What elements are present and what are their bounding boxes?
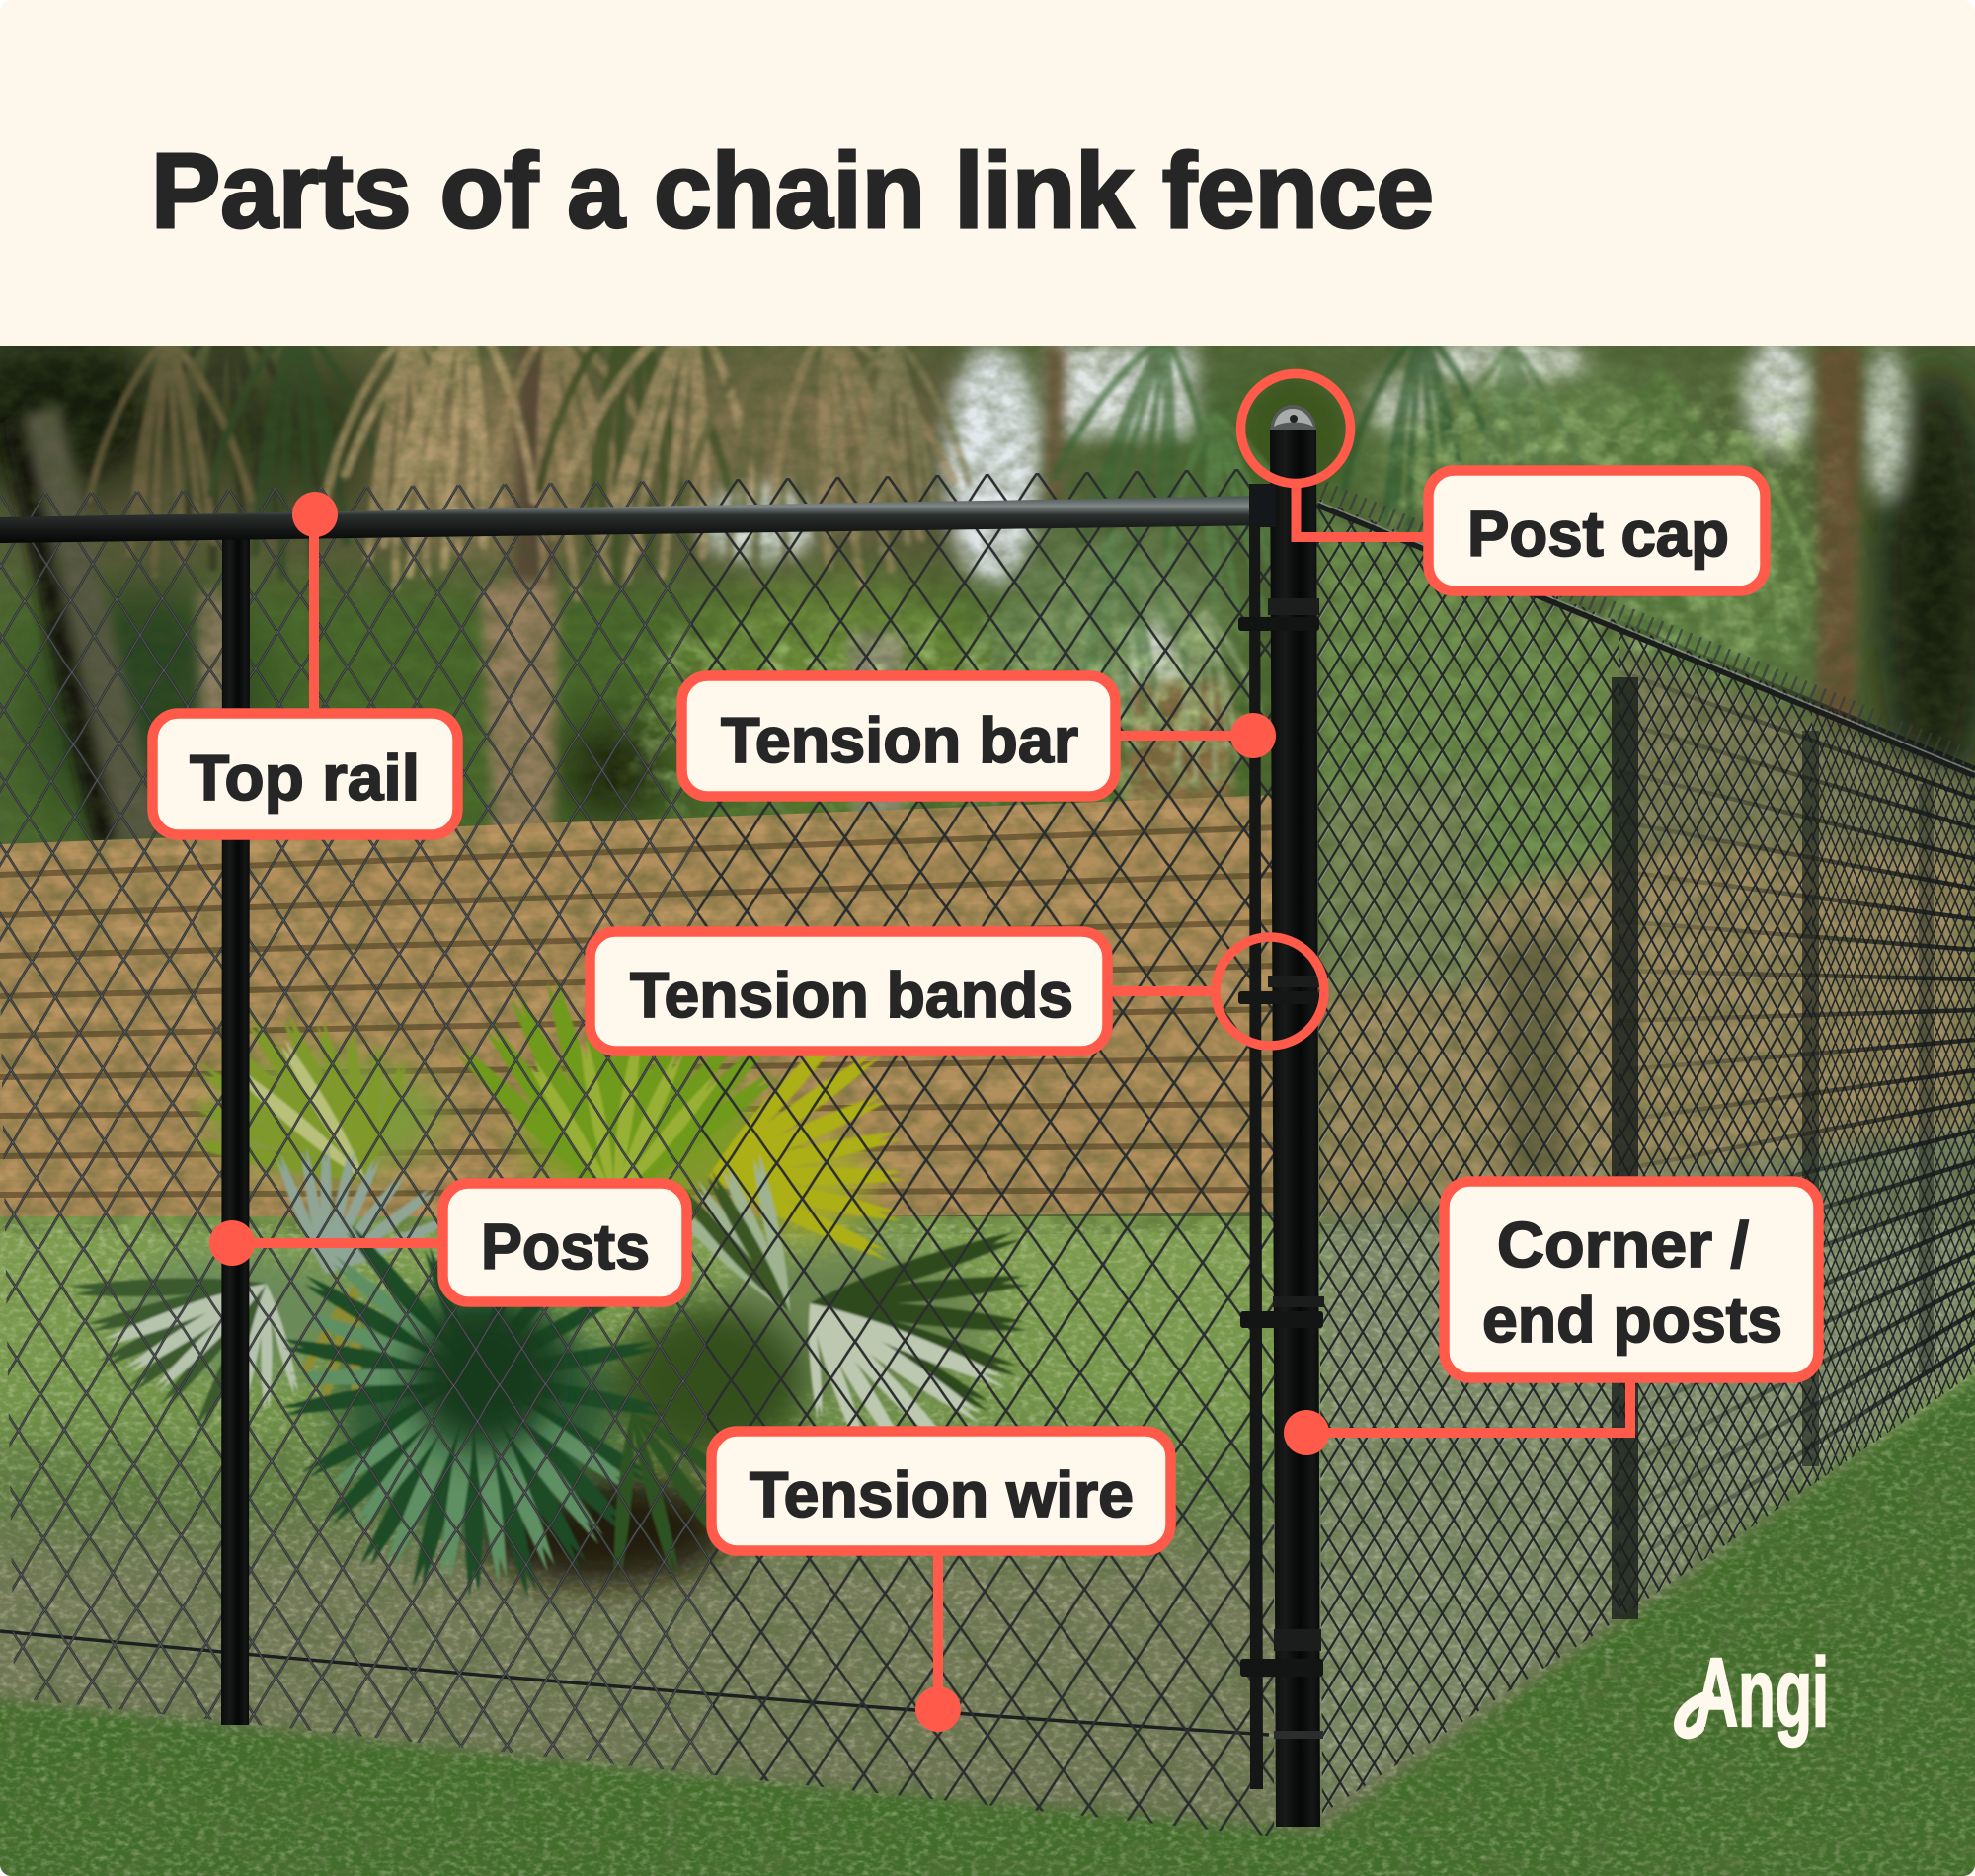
left line post — [221, 533, 250, 1725]
callout: Tension wire: Tension wire — [750, 1458, 1134, 1530]
rail end connector — [1252, 484, 1276, 527]
left striped fan — [69, 1275, 274, 1434]
perspective line posts — [1612, 677, 1934, 1619]
right foliage highlights — [1382, 375, 1847, 681]
palm fronds in canopy — [85, 346, 1817, 807]
tension bar — [1249, 484, 1263, 1789]
tree trunks — [0, 346, 1861, 849]
logo: Angi: Angi — [1695, 1638, 1829, 1747]
title: Parts of a chain link fence — [151, 130, 1434, 250]
olive left accent — [293, 1281, 361, 1411]
foreground grass — [0, 1377, 1975, 1876]
chain link mesh front — [0, 466, 1428, 1876]
perspective chain link mesh — [1316, 498, 1975, 1814]
silver upper-left fan — [273, 1146, 455, 1280]
logo: Angi — [1680, 1638, 1829, 1747]
shadow under plant — [474, 1476, 731, 1585]
callout: Tension bands — [591, 932, 1324, 1051]
header panel — [0, 0, 1975, 346]
plant dark core — [410, 1303, 558, 1451]
left upper fan — [187, 1009, 410, 1188]
lower right fan — [610, 1406, 773, 1580]
top center fan — [449, 963, 784, 1207]
perspective top rail — [1318, 490, 1975, 776]
callout: Tension wire — [711, 1432, 1171, 1732]
callout: Tension bar: Tension bar — [721, 704, 1078, 776]
callout: Posts — [209, 1183, 687, 1301]
corner post — [1238, 405, 1324, 1827]
callout: Top rail: Top rail — [190, 742, 420, 814]
plant colour masses — [118, 1056, 988, 1530]
callout: Top rail — [152, 492, 458, 835]
texture overlay — [0, 346, 1975, 1234]
callout: Posts: Posts — [481, 1211, 650, 1283]
right striped fan — [805, 1226, 1030, 1416]
callout: Post cap: Post cap — [1467, 498, 1729, 570]
central dark fan — [278, 1220, 670, 1600]
palm plant — [69, 963, 1030, 1600]
yellow right fan — [702, 1024, 907, 1264]
lawn — [0, 1216, 1975, 1876]
plant blades — [69, 963, 1030, 1600]
tension wire — [0, 1631, 1269, 1735]
grass texture — [0, 1224, 1975, 1876]
callout: Tension bar — [681, 675, 1276, 796]
foliage highlights — [610, 604, 1249, 818]
callout: Corner / end posts: Corner / — [1497, 1209, 1749, 1281]
callout: Post cap — [1240, 373, 1766, 590]
callout: Tension bands: Tension bands — [630, 959, 1073, 1031]
grass dark mottling — [0, 1442, 1975, 1876]
right silver upper fan — [665, 1153, 797, 1318]
top rail — [0, 496, 1269, 543]
wood plank fence — [0, 795, 1279, 1224]
background behind perspective fence — [1318, 513, 1975, 1807]
callout: Corner / end posts — [1284, 1181, 1819, 1455]
tree canopy background — [0, 283, 1975, 1234]
callout: Corner / end posts: end posts — [1482, 1284, 1782, 1356]
